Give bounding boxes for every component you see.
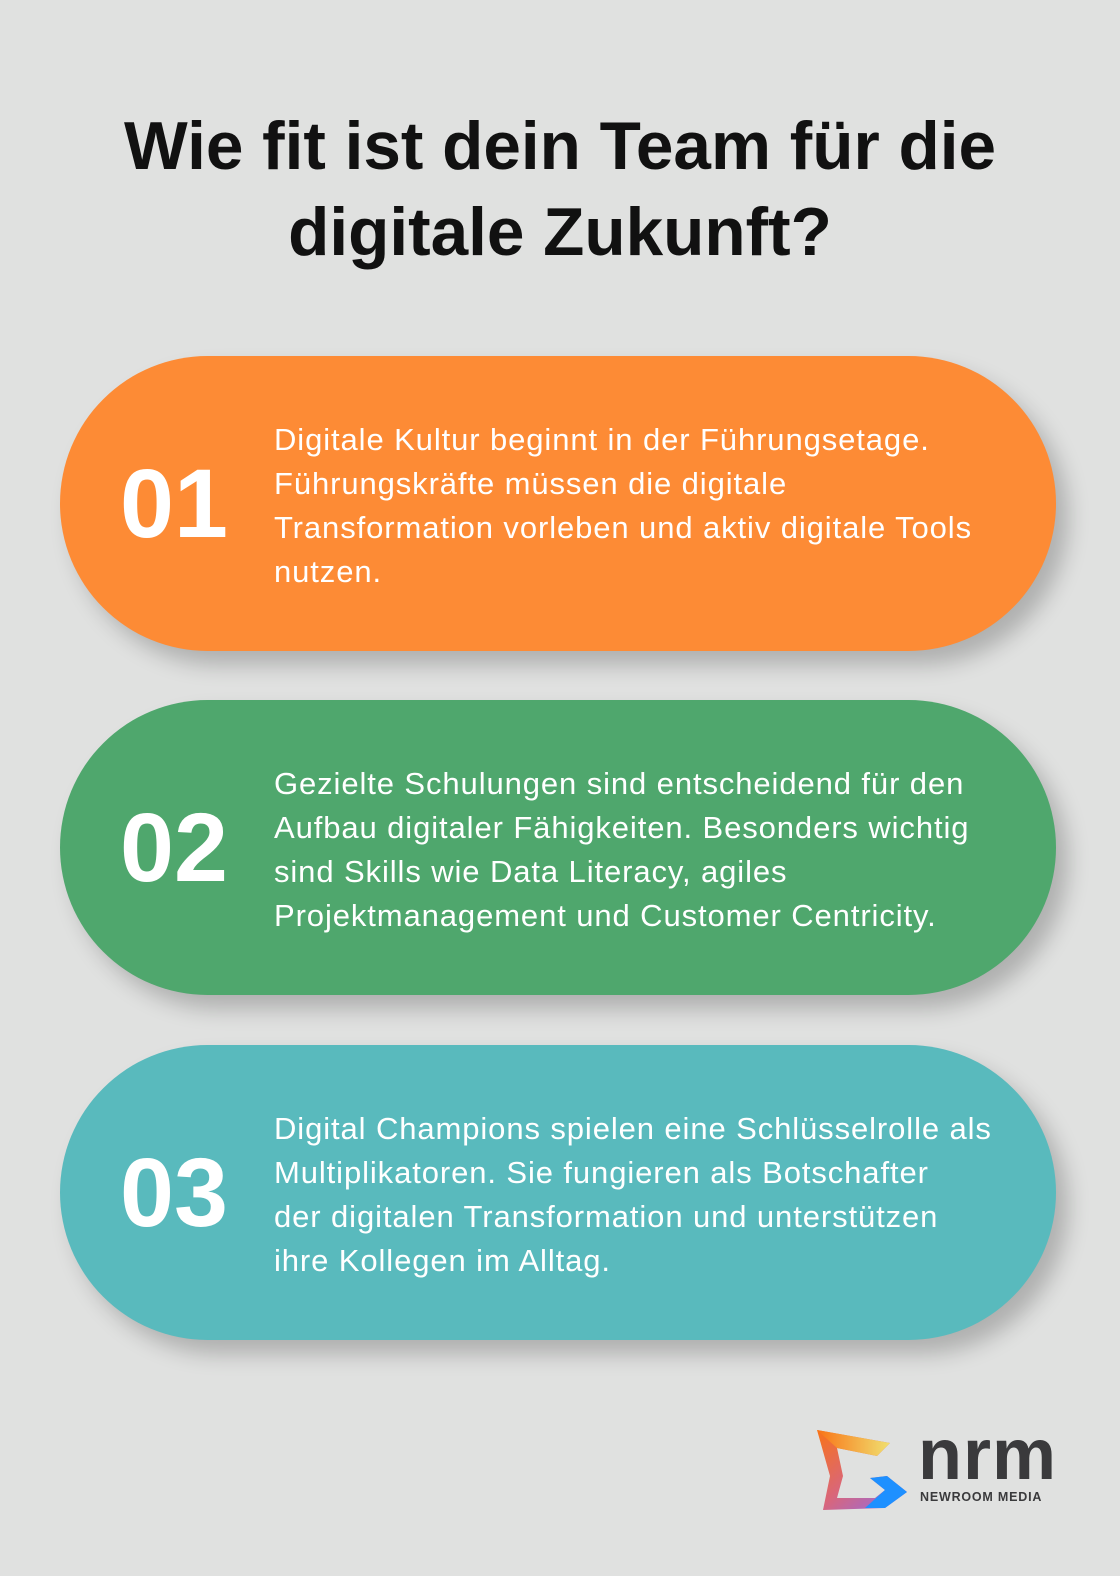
text 03: Digital Champions spielen eine Schlüsselrolle als xyxy=(274,1110,992,1146)
logo: NEWROOM MEDIA xyxy=(920,1490,1042,1504)
text 01: Transformation vorleben und aktiv digitale Tools xyxy=(274,510,972,544)
panel: 01 xyxy=(60,356,1056,651)
text 01: nutzen. xyxy=(274,554,382,588)
number 03: 03 xyxy=(120,1138,228,1247)
text 03 xyxy=(274,1110,992,1278)
icon: logo mark xyxy=(817,1430,907,1510)
text 02: sind Skills wie Data Literacy, agiles xyxy=(274,854,787,888)
logo text: nrm xyxy=(918,1415,1057,1495)
text 02 xyxy=(274,766,969,932)
logo xyxy=(817,1415,1057,1510)
text 02: Gezielte Schulungen sind entscheidend für den xyxy=(274,766,964,800)
text 03: ihre Kollegen im Alltag. xyxy=(274,1242,611,1278)
number 02: 02 xyxy=(120,793,228,902)
panel: 02 xyxy=(60,700,1056,995)
title: Wie fit ist dein Team für die xyxy=(124,109,996,184)
panel: 03 xyxy=(60,1045,1056,1340)
text 03: Multiplikatoren. Sie fungieren als Botschafter xyxy=(274,1154,929,1190)
text 02: Aufbau digitaler Fähigkeiten. Besonders wichtig xyxy=(274,810,969,844)
text 02: Projektmanagement und Customer Centricity. xyxy=(274,898,937,932)
title: digitale Zukunft? xyxy=(288,195,832,270)
text 01 xyxy=(274,422,972,588)
title xyxy=(124,109,996,270)
number 01: 01 xyxy=(120,449,228,558)
text 03: der digitalen Transformation und unterstützen xyxy=(274,1198,938,1234)
text 01: Digitale Kultur beginnt in der Führungsetage. xyxy=(274,422,930,456)
text 01: Führungskräfte müssen die digitale xyxy=(274,466,787,500)
